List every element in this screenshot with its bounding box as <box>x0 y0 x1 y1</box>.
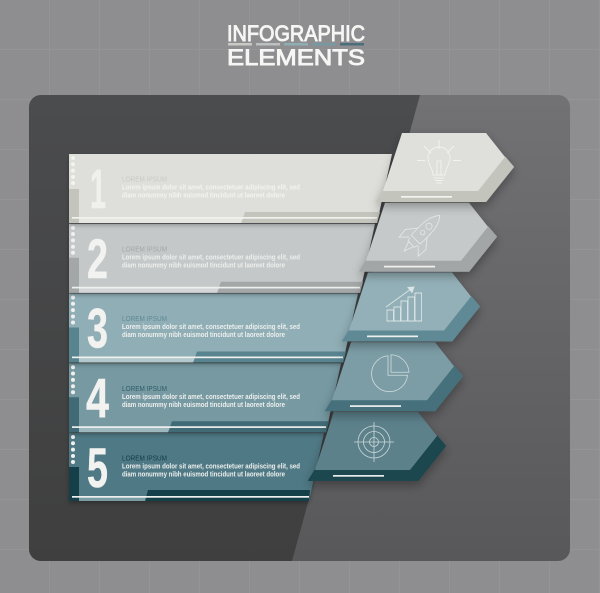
panel: row 5: Lorem ipsum dolor sit amet, consectetuer adipiscing elit, sed <box>122 464 300 470</box>
panel: row 3: 3 <box>87 296 108 360</box>
icon: rocket <box>394 205 450 261</box>
panel: row 5: diam nonummy nibh euismod tincidunt ut laoreet dolore <box>122 472 285 478</box>
panel: row 5: LOREM IPSUM <box>122 456 167 462</box>
panel: row 5: 5 <box>87 436 108 499</box>
title line: elements: ELEMENTS <box>227 45 365 70</box>
panel: row 1: diam nonummy nibh euismod tincidunt ut laoreet dolore <box>122 192 285 200</box>
panel: row 4: 4 <box>86 366 109 429</box>
title line: infographic: INFOGRAPHIC <box>227 21 365 46</box>
colour strip <box>228 43 364 46</box>
icon: light bulb <box>417 140 461 183</box>
icon: target <box>354 422 394 462</box>
panel: row 2 <box>69 224 375 293</box>
tab 5: target <box>308 412 446 480</box>
panel: row 1 <box>69 154 392 223</box>
icon: bar chart with arrow <box>386 287 422 321</box>
panel: row 3 <box>69 294 358 362</box>
panel: row 3: LOREM IPSUM <box>122 316 167 323</box>
panel: row 2: diam nonummy nibh euismod tincidunt ut laoreet dolore <box>122 262 285 269</box>
panel: row 4: diam nonummy nibh euismod tincidunt ut laoreet dolore <box>122 402 285 409</box>
title <box>227 21 365 70</box>
panel: row 1: LOREM IPSUM <box>122 176 167 184</box>
panel: row 2: 2 <box>87 227 108 290</box>
panel: row 1: 1 <box>90 157 106 220</box>
panel: row 3: Lorem ipsum dolor sit amet, consectetuer adipiscing elit, sed <box>122 324 300 331</box>
panel: row 4: LOREM IPSUM <box>122 386 167 393</box>
panel: row 5 <box>69 433 324 501</box>
tab 2: rocket <box>360 203 496 271</box>
panel: row 4: Lorem ipsum dolor sit amet, consectetuer adipiscing elit, sed <box>122 394 300 401</box>
panel: row 2: Lorem ipsum dolor sit amet, consectetuer adipiscing elit, sed <box>122 254 300 261</box>
panel: row 4 <box>69 363 341 432</box>
panel: background card <box>29 95 570 561</box>
tab 1: light bulb <box>376 133 514 202</box>
panel: row 2: LOREM IPSUM <box>122 246 167 253</box>
tab 4: pie chart <box>326 342 462 411</box>
icon: pie chart <box>372 355 409 392</box>
tab 3: bar chart <box>342 272 480 341</box>
panel: row 1: Lorem ipsum dolor sit amet, consectetuer adipiscing elit, sed <box>122 184 300 192</box>
panel: row 3: diam nonummy nibh euismod tincidunt ut laoreet dolore <box>122 332 285 339</box>
